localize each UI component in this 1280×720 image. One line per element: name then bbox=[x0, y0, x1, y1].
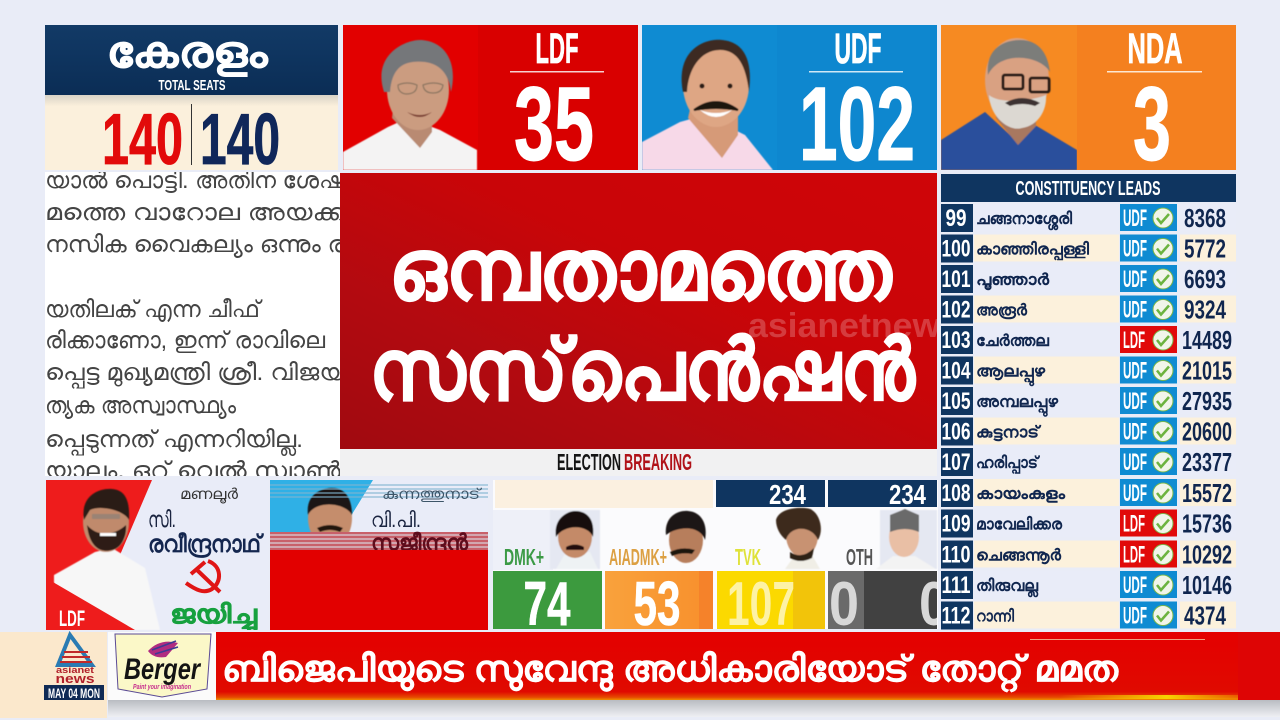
row 108 bbox=[941, 478, 1236, 508]
candidate name: രവീന്ദ്രനാഥ് bbox=[148, 531, 264, 558]
row 109: 109 bbox=[942, 510, 970, 538]
strip: election breaking bbox=[340, 449, 937, 476]
row 106 bbox=[941, 416, 1236, 446]
panel: LDF tally bbox=[343, 25, 638, 183]
logo: asianet news: news bbox=[56, 671, 94, 686]
row 99: 8368 bbox=[1184, 203, 1226, 233]
row 104: 21015 bbox=[1182, 356, 1232, 386]
row 107 bbox=[941, 447, 1236, 477]
row 106: 20600 bbox=[1182, 416, 1232, 446]
candidate name: സജീന്ദ്രൻ bbox=[371, 530, 469, 556]
panel: bottom channel bug bbox=[0, 632, 107, 718]
tile: others seats: 0 bbox=[829, 570, 859, 639]
row 108: 15572 bbox=[1182, 478, 1232, 508]
row 111: UDF bbox=[1123, 572, 1147, 599]
label: breaking: BREAKING bbox=[624, 449, 692, 475]
row 105: 27935 bbox=[1182, 386, 1232, 416]
label: UDF: UDF bbox=[834, 25, 882, 73]
heading: constituency leads: CONSTITUENCY LEADS bbox=[1016, 178, 1160, 200]
candidate initial: സി. bbox=[148, 507, 176, 532]
ticker text: ബിജെപിയുടെ സുവേന്ദു അധികാരിയോട് തോറ്റ് മമത bbox=[222, 648, 1119, 693]
sponsor: Berger logo: Paint your imagination bbox=[133, 684, 191, 691]
label: election: ELECTION bbox=[557, 449, 621, 475]
row 101: 101 bbox=[942, 266, 970, 293]
row 107: ഹരിപ്പാട് bbox=[976, 454, 1040, 475]
row 102: 9324 bbox=[1184, 294, 1226, 324]
row 109: മാവേലിക്കര bbox=[976, 516, 1063, 534]
panel: main headline bbox=[340, 173, 960, 449]
tile: DMK+ seats: 74 bbox=[524, 570, 571, 639]
row 102: 102 bbox=[942, 296, 970, 324]
row 112: UDF bbox=[1123, 602, 1147, 630]
row 100 bbox=[941, 234, 1236, 264]
logo: asianet news: asianet bbox=[56, 665, 94, 675]
icon: hammer and sickle bbox=[186, 561, 220, 592]
row 109 bbox=[941, 508, 1236, 538]
row 106: കുട്ടനാട് bbox=[976, 424, 1042, 442]
row 101: പൂഞ്ഞാർ bbox=[976, 272, 1050, 291]
row 111: തിരുവല്ല bbox=[976, 577, 1039, 599]
number: total 234: 234 bbox=[889, 479, 926, 510]
label: DMK+: DMK+ bbox=[504, 544, 544, 570]
number: declared seats: 140 bbox=[102, 100, 183, 180]
number: NDA seats: 3 bbox=[1133, 66, 1171, 183]
row 110 bbox=[941, 540, 1236, 570]
panel: UDF tally bbox=[642, 25, 937, 183]
label: constituency: കുന്നത്തുനാട് bbox=[382, 486, 483, 503]
row 103: 103 bbox=[942, 327, 970, 354]
row 100: UDF bbox=[1123, 236, 1147, 262]
row 101 bbox=[941, 264, 1236, 294]
text block: scrolling article: യാലും, ഒറ്റ് വെൽ സ്വാൺ bbox=[45, 457, 342, 486]
row 109: 15736 bbox=[1182, 508, 1232, 538]
row 100: കാഞ്ഞിരപ്പള്ളി bbox=[976, 240, 1090, 262]
tile: others seats: 0 bbox=[919, 570, 949, 639]
row 104: ആലപ്പുഴ bbox=[976, 364, 1046, 387]
row 105: 105 bbox=[942, 388, 970, 415]
text block: scrolling article bbox=[45, 167, 346, 486]
row 112: റാന്നി bbox=[976, 608, 1014, 626]
label: LDF: LDF bbox=[59, 606, 85, 631]
portrait: AIADMK leader bbox=[666, 511, 706, 563]
text block: scrolling article: മത്തെ വാറോല അയക്ക bbox=[45, 199, 346, 225]
row 103 bbox=[941, 325, 1236, 355]
row 107: 107 bbox=[942, 449, 970, 476]
tile: TVK seats: 107 bbox=[727, 570, 795, 639]
number: total 234: 234 bbox=[769, 479, 806, 510]
row 100: 5772 bbox=[1184, 234, 1226, 264]
row 110: 10292 bbox=[1182, 540, 1232, 570]
tile: others seats bbox=[828, 571, 937, 629]
ticker: headline banner bbox=[216, 632, 1280, 700]
status: won: ജയിച്ചു bbox=[170, 599, 258, 636]
row 112 bbox=[941, 600, 1236, 630]
row 99: UDF bbox=[1123, 205, 1147, 232]
label: constituency: മണലൂർ bbox=[180, 486, 239, 504]
row 102 bbox=[941, 294, 1236, 324]
label: NDA: NDA bbox=[1128, 25, 1182, 73]
date: MAY 04 MON bbox=[48, 685, 100, 701]
row 100: 100 bbox=[942, 236, 970, 262]
row 99: 99 bbox=[946, 205, 966, 232]
row 103: ചേർത്തല bbox=[976, 333, 1049, 350]
row 109: LDF bbox=[1123, 510, 1145, 538]
row 107: UDF bbox=[1123, 449, 1147, 476]
portrait: candidate bbox=[306, 487, 353, 532]
row 110: ചെങ്ങന്നൂർ bbox=[976, 548, 1062, 566]
label: OTH: OTH bbox=[846, 544, 873, 570]
number: UDF seats: 102 bbox=[799, 66, 915, 183]
text block: scrolling article: യതിലക് എന്ന ചീഫ് bbox=[45, 296, 263, 323]
label: AIADMK+: AIADMK+ bbox=[609, 544, 667, 570]
row 105: UDF bbox=[1123, 388, 1147, 415]
tile: AIADMK+ seats: 53 bbox=[634, 570, 680, 639]
portrait: TVK leader bbox=[776, 508, 821, 569]
text block: scrolling article: ത്യക അസ്വാസ്ഥ്യം bbox=[45, 392, 236, 419]
row 105 bbox=[941, 386, 1236, 417]
row 112: 4374 bbox=[1184, 600, 1226, 630]
row 111: 10146 bbox=[1182, 570, 1232, 600]
text block: scrolling article: പ്പെടുന്നത് എന്നറിയില്ല. bbox=[45, 426, 303, 456]
portrait: UDF leader bbox=[642, 40, 773, 170]
row 110: 110 bbox=[942, 542, 970, 568]
row 111 bbox=[941, 570, 1236, 600]
row 105: അമ്പലപ്പുഴ bbox=[976, 394, 1059, 417]
row 108: കായംകുളം bbox=[976, 486, 1066, 503]
logo: asianet news bbox=[56, 635, 94, 686]
panel: Kerala total seats bbox=[45, 25, 338, 180]
row 103: LDF bbox=[1123, 327, 1145, 354]
row 104 bbox=[941, 356, 1236, 387]
text block: scrolling article: യാൽ പൊട്ടി. അതിന ശേഷ bbox=[45, 167, 346, 193]
label: TVK: TVK bbox=[735, 544, 761, 570]
headline line 1: ഒമ്പതാമത്തെ bbox=[389, 223, 893, 317]
headline line 2: സസ്‌പെൻഷൻ bbox=[370, 323, 916, 417]
row 99 bbox=[941, 203, 1236, 233]
table: constituency leads bbox=[941, 174, 1236, 630]
watermark: asianetnews bbox=[748, 307, 960, 345]
portrait: LDF leader bbox=[343, 40, 477, 170]
row 103: 14489 bbox=[1182, 325, 1232, 355]
text block: scrolling article: നസിക വൈകല്യം ഒന്നും ര bbox=[45, 231, 346, 258]
row 102: അരൂർ bbox=[976, 302, 1028, 320]
text block: scrolling article: രിക്കാണോ, ഇന്ന് രാവിലെ bbox=[45, 327, 325, 353]
row 108: 108 bbox=[942, 480, 970, 507]
row 108: UDF bbox=[1123, 480, 1147, 507]
row 104: 104 bbox=[942, 358, 971, 384]
portrait: DMK leader bbox=[550, 510, 600, 569]
row 104: UDF bbox=[1123, 358, 1147, 384]
portrait: candidate bbox=[54, 489, 160, 630]
sponsor: Berger logo bbox=[108, 632, 216, 700]
row 99: ചങ്ങനാശ്ശേരി bbox=[976, 210, 1073, 232]
row 112: 112 bbox=[942, 602, 970, 630]
sponsor: Berger logo: Berger bbox=[124, 653, 202, 686]
label: LDF: LDF bbox=[536, 25, 578, 73]
row 101: 6693 bbox=[1184, 264, 1226, 294]
card: winning candidate bbox=[46, 480, 268, 636]
row 107: 23377 bbox=[1182, 447, 1232, 477]
row 101: UDF bbox=[1123, 266, 1147, 293]
number: total seats: 140 bbox=[200, 100, 280, 180]
label: total seats: TOTAL SEATS bbox=[158, 77, 226, 94]
row 102: UDF bbox=[1123, 296, 1147, 324]
portrait: NDA leader bbox=[941, 38, 1077, 170]
tile: AIADMK+ seats bbox=[605, 570, 713, 639]
panel: Tamil Nadu tally bbox=[493, 479, 949, 639]
number: LDF seats: 35 bbox=[514, 66, 594, 183]
text block: scrolling article: പ്പെട്ട മുഖ്യമന്ത്രി ശ്രീ. വിജയ bbox=[45, 359, 346, 388]
candidate initial: വി.പി. bbox=[371, 509, 421, 532]
heading: Kerala: കേരളം bbox=[106, 28, 269, 77]
portrait: others placeholder bbox=[876, 509, 937, 569]
row 106: UDF bbox=[1123, 418, 1147, 446]
card: candidate transition bbox=[270, 480, 488, 630]
row 106: 106 bbox=[942, 418, 970, 446]
panel: NDA tally bbox=[941, 25, 1236, 183]
tile: DMK+ seats bbox=[493, 570, 602, 639]
row 110: LDF bbox=[1123, 542, 1145, 568]
row 111: 111 bbox=[942, 572, 970, 599]
